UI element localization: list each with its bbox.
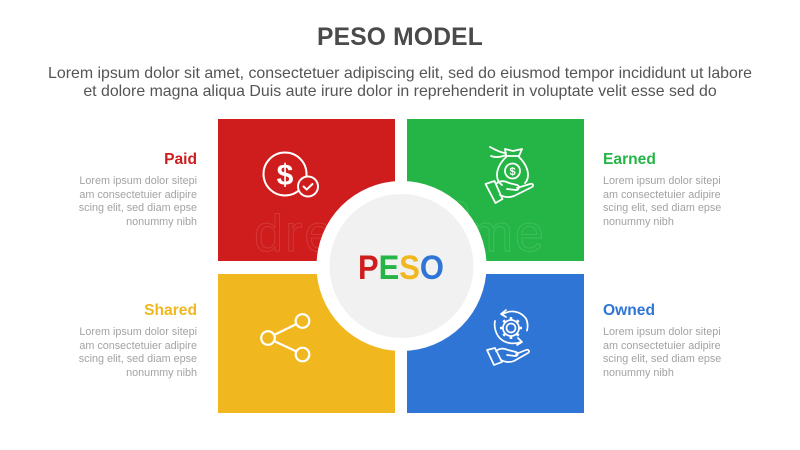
text block: Earned: am consectetuier adipire	[603, 189, 721, 201]
text block: Owned: scing elit, sed diam epse	[603, 353, 721, 365]
subtitle text: Lorem ipsum dolor sit amet, consectetuer adipiscing elit, sed do eiusmod tempor incididunt ut labore	[48, 65, 752, 82]
subtitle text	[48, 65, 752, 100]
icon: dollar with check: $	[277, 159, 294, 192]
subtitle text: et dolore magna aliqua Duis aute irure dolor in reprehenderit in voluptate velit esse sed do	[83, 82, 717, 100]
panel: paid red	[218, 119, 395, 261]
watermark: dreamstime	[254, 205, 546, 263]
icon: dollar with check	[264, 152, 318, 196]
panel: owned blue	[407, 274, 584, 413]
centre circle	[330, 194, 474, 338]
text block: Earned	[603, 151, 721, 228]
text block: Shared: Lorem ipsum dolor sitepi	[79, 326, 197, 338]
text block: Earned: Lorem ipsum dolor sitepi	[603, 175, 721, 187]
text block: Owned: Lorem ipsum dolor sitepi	[603, 326, 721, 338]
text block: Shared: scing elit, sed diam epse	[79, 353, 197, 365]
PESO label: PESO	[358, 249, 444, 287]
text block: Owned	[603, 302, 721, 379]
text block: Earned: nonummy nibh	[603, 216, 674, 228]
text block: Owned: Owned	[603, 302, 655, 319]
panel: earned green	[407, 119, 584, 261]
text block: Earned: Earned	[603, 151, 656, 168]
text block: Paid: Lorem ipsum dolor sitepi	[79, 175, 197, 187]
text block: Owned: am consectetuier adipire	[603, 340, 721, 352]
icon: money bag on hand	[486, 147, 533, 203]
centre circle ring	[316, 181, 486, 351]
text block: Shared	[79, 302, 197, 379]
text block: Shared: nonummy nibh	[126, 367, 197, 379]
text block: Paid: Paid	[164, 151, 197, 168]
icon: share nodes	[261, 314, 309, 361]
text block: Paid	[79, 151, 197, 228]
text block: Paid: am consectetuier adipire	[79, 189, 197, 201]
title: PESO MODEL	[317, 24, 483, 51]
text block: Owned: nonummy nibh	[603, 367, 674, 379]
text block: Paid: scing elit, sed diam epse	[79, 202, 197, 214]
icon: gear and cycle on hand	[487, 310, 529, 365]
text block: Paid: nonummy nibh	[126, 216, 197, 228]
panel: shared yellow	[218, 274, 395, 413]
text block: Shared: Shared	[144, 302, 197, 319]
icon: money bag on hand: $	[509, 166, 516, 178]
text block: Earned: scing elit, sed diam epse	[603, 202, 721, 214]
text block: Shared: am consectetuier adipire	[79, 340, 197, 352]
